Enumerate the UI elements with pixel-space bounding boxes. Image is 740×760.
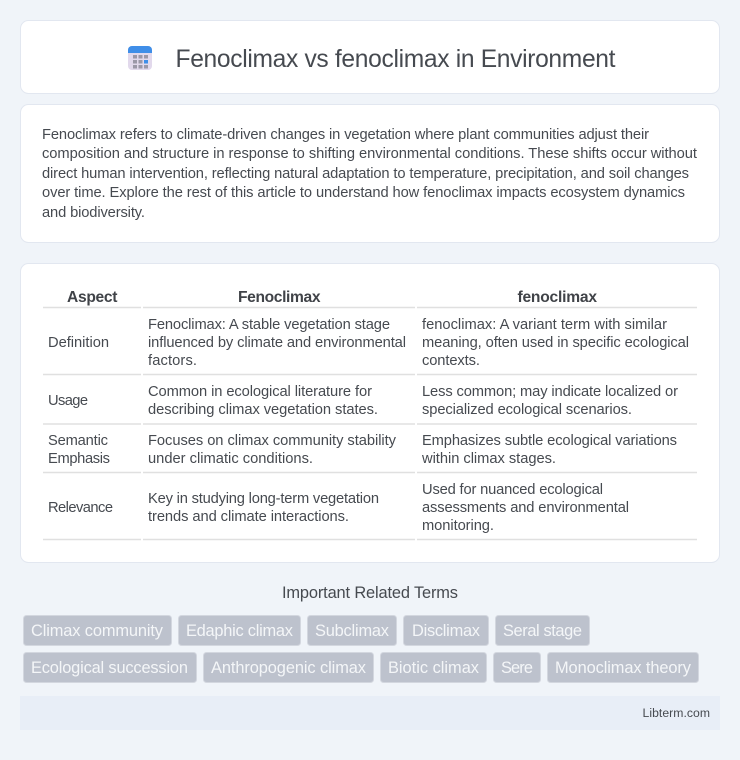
tag: sere: Sere: [501, 659, 533, 677]
table row: relevance: Relevance: [48, 500, 113, 516]
tag: climax community: [24, 616, 172, 646]
table row: definition: factors.: [148, 353, 197, 369]
tag: monoclimax theory: Monoclimax theory: [555, 659, 692, 677]
table row: semantic emphasis: Focuses on climax community stability: [148, 433, 397, 449]
table row: relevance: Used for nuanced ecological: [422, 482, 603, 498]
table row: semantic emphasis: under climatic conditions.: [148, 451, 313, 467]
table row: definition: meaning, often used in specific ecological: [422, 335, 689, 351]
tag: climax community: Climax community: [31, 622, 164, 640]
tag: seral stage: Seral stage: [503, 622, 582, 640]
tag: seral stage: [496, 616, 590, 646]
table row: usage: describing climax vegetation states.: [148, 402, 378, 418]
text block: introduction paragraph: and biodiversity.: [42, 205, 145, 221]
table row: relevance: trends and climate interactions.: [148, 509, 349, 525]
tag: edaphic climax: Edaphic climax: [186, 622, 294, 640]
table row: definition: contexts.: [422, 353, 480, 369]
table row: definition: [48, 317, 689, 369]
text block: introduction paragraph: composition and structure in response to shifting environmental conditions. These shifts occur without: [42, 146, 697, 162]
table row: usage: specialized ecological scenarios.: [422, 402, 632, 418]
tag: monoclimax theory: [548, 652, 698, 682]
table row: definition: influenced by climate and environmental: [148, 335, 406, 351]
table row: relevance: monitoring.: [422, 518, 494, 534]
tag: anthropogenic climax: [204, 652, 374, 682]
table row: definition: fenoclimax: A variant term with similar: [422, 317, 667, 333]
title: Fenoclimax vs fenoclimax in Environment: [176, 46, 616, 73]
table row: usage: Usage: [48, 393, 88, 409]
table row: usage: Common in ecological literature for: [148, 384, 372, 400]
table row: usage: Less common; may indicate localized or: [422, 384, 678, 400]
text block: introduction paragraph: Fenoclimax refers to climate-driven changes in vegetation where plant communities adjust their: [42, 127, 649, 143]
tag: disclimax: Disclimax: [412, 622, 481, 640]
tag: ecological succession: [24, 652, 196, 682]
panel: title header: [20, 20, 720, 94]
table header row: Fenoclimax: [238, 289, 321, 306]
tag: anthropogenic climax: Anthropogenic climax: [211, 659, 367, 677]
table row: semantic emphasis: [48, 433, 677, 467]
table header row: fenoclimax: [518, 289, 597, 306]
heading: important related terms: Important Related Terms: [282, 584, 458, 602]
table row: semantic emphasis: Semantic: [48, 433, 108, 449]
tag: edaphic climax: [178, 616, 300, 646]
text block: introduction paragraph: over time. Explore the rest of this article to understand how fenoclimax impacts ecosystem dynamics: [42, 185, 685, 201]
tag: biotic climax: [380, 652, 486, 682]
tag: subclimax: [308, 616, 396, 646]
tag: biotic climax: Biotic climax: [388, 659, 480, 677]
table row: definition: Definition: [48, 335, 109, 351]
table row: usage: [48, 384, 678, 418]
table row: semantic emphasis: Emphasizes subtle ecological variations: [422, 433, 677, 449]
panel: comparison table: [20, 264, 720, 562]
tags: related terms: [24, 616, 698, 682]
tag: ecological succession: Ecological succession: [31, 659, 188, 677]
tag: sere: [494, 652, 540, 682]
table header row: [67, 289, 597, 306]
table row: semantic emphasis: Emphasis: [48, 451, 110, 467]
table row: definition: Fenoclimax: A stable vegetation stage: [148, 317, 390, 333]
tag: disclimax: [404, 616, 488, 646]
text block: introduction paragraph: direct human intervention, reflecting natural adaptation to temperature, precipitation, and soil changes: [42, 166, 689, 182]
footer credit: Libterm.com: [642, 706, 710, 720]
table row: relevance: Key in studying long-term vegetation: [148, 491, 379, 507]
table row: relevance: assessments and environmental: [422, 500, 629, 516]
footer: [20, 696, 720, 730]
tag: subclimax: Subclimax: [315, 622, 390, 640]
table row: semantic emphasis: within climax stages.: [421, 451, 556, 467]
text block: introduction paragraph: [42, 127, 697, 221]
panel: introduction: [20, 104, 720, 242]
icon: calendar: [128, 46, 152, 70]
table header row: Aspect: [67, 289, 118, 306]
table row: relevance: [48, 482, 629, 534]
